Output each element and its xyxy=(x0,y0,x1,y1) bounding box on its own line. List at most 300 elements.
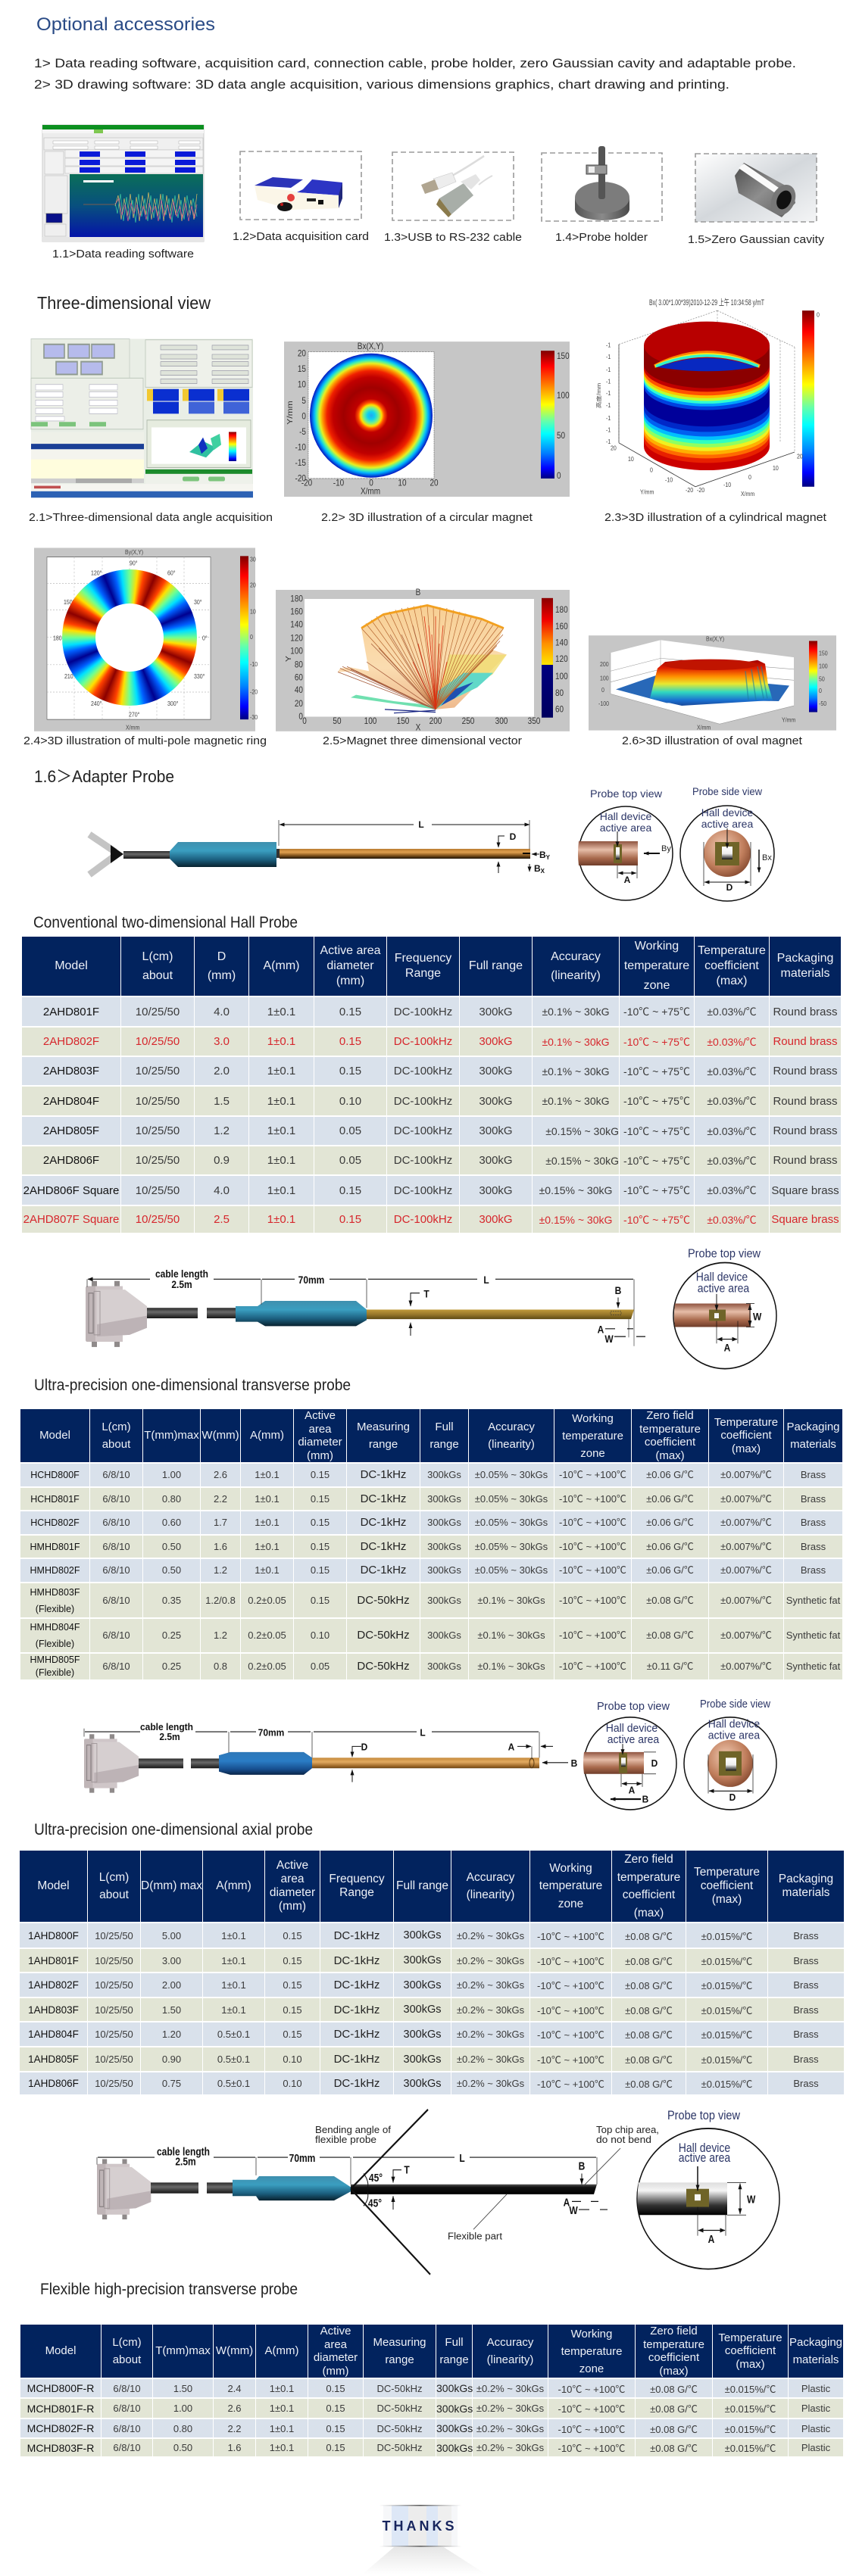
panel: cylindrical magnet plot: Bx( 3.00*1.00*39)2010-12-29 上午 10:34:58 y/mT xyxy=(649,297,764,307)
label: adapter probe views: Probe top view xyxy=(590,787,663,800)
table: ultra-precision one-dimensional axial probe: 1±0.1 xyxy=(221,1929,246,1941)
table: ultra-precision one-dimensional axial probe: 0.15 xyxy=(283,1955,302,1966)
table: conventional two-dimensional hall probe: -10℃ ~ +75℃ xyxy=(623,1184,690,1196)
panel: circular magnet heat map: 150 xyxy=(557,351,570,361)
panel: zero gaussian cavity xyxy=(695,154,817,222)
panel: magnet three dimensional vector plot: 80 xyxy=(555,688,564,698)
table: ultra-precision one-dimensional transverse probe: HMHD803F xyxy=(30,1587,80,1598)
table: ultra-precision one-dimensional transverse probe: 0.80 xyxy=(162,1493,181,1504)
panel: cylindrical magnet plot: 10 xyxy=(773,464,779,472)
detail: adapter probe top view circle: Hall device xyxy=(600,810,651,822)
table: ultra-precision one-dimensional axial probe: ±0.2% ~ 30kGs xyxy=(457,1929,524,1941)
table: conventional two-dimensional hall probe: Working xyxy=(635,940,679,953)
detail: adapter probe side view circle: D xyxy=(726,882,733,893)
detail: axial probe top view circle xyxy=(583,1701,676,1810)
table: ultra-precision one-dimensional axial probe: 300kGs xyxy=(403,2004,441,2016)
table: ultra-precision one-dimensional transverse probe: ±0.05% ~ 30kGs xyxy=(475,1469,548,1480)
panel: cylindrical magnet plot: -1 xyxy=(606,353,611,360)
panel: magnet three dimensional vector plot: 300 xyxy=(495,716,508,726)
color bar: circular magnet xyxy=(541,351,554,479)
table: ultra-precision one-dimensional axial probe: 1AHD804F xyxy=(28,2029,79,2040)
table: ultra-precision one-dimensional axial probe: 10/25/50 xyxy=(95,1955,133,1966)
table: ultra-precision one-dimensional transverse probe: HMHD801F xyxy=(30,1542,80,1552)
heading: three-dimensional view: Three-dimensional view xyxy=(37,293,211,313)
table: flexible high-precision transverse probe: coefficient xyxy=(648,2351,699,2364)
table: conventional two-dimensional hall probe: 4.0 xyxy=(214,1184,230,1196)
table: ultra-precision one-dimensional transverse probe: 6/8/10 xyxy=(102,1469,130,1480)
table: ultra-precision one-dimensional transverse probe: ±0.05% ~ 30kGs xyxy=(475,1564,548,1576)
illustration: adapter probe: B xyxy=(534,863,541,874)
table: conventional two-dimensional hall probe: 0.05 xyxy=(339,1124,361,1137)
table: ultra-precision one-dimensional transverse probe: -10℃ ~ +100℃ xyxy=(559,1661,626,1672)
table: flexible high-precision transverse probe: ±0.015%/℃ xyxy=(725,2403,776,2415)
table: ultra-precision one-dimensional transverse probe: 1.6 xyxy=(214,1540,227,1552)
table: flexible high-precision transverse probe: 6/8/10 xyxy=(113,2403,141,2414)
table: conventional two-dimensional hall probe: 2AHD805F xyxy=(43,1124,99,1137)
panel: magnet three dimensional vector plot: 20 xyxy=(295,699,303,709)
panel: magnet three dimensional vector plot: 60 xyxy=(295,672,303,683)
panel: cylindrical magnet plot: -20 xyxy=(697,486,704,494)
panel: multi-pole magnetic ring plot background: 30 xyxy=(250,556,256,563)
table: ultra-precision one-dimensional transverse probe: 0.8 xyxy=(214,1661,227,1672)
table: flexible high-precision transverse probe: -10℃ ~ +100℃ xyxy=(558,2423,625,2435)
table: ultra-precision one-dimensional transverse probe: (Flexible) xyxy=(36,1604,74,1614)
table: ultra-precision one-dimensional transverse probe: 0.2±0.05 xyxy=(248,1595,286,1605)
table: ultra-precision one-dimensional axial probe: Working xyxy=(549,1862,592,1875)
table: ultra-precision one-dimensional axial probe: zone xyxy=(558,1898,583,1910)
table: conventional two-dimensional hall probe: 2AHD801F xyxy=(43,1006,99,1018)
label: adapter probe views: Probe side view xyxy=(692,785,763,797)
table: ultra-precision one-dimensional axial probe: ±0.015%/℃ xyxy=(701,1931,752,1941)
panel: oval magnet surface plot: 0 xyxy=(601,686,604,694)
table: ultra-precision one-dimensional axial probe: 300kGs xyxy=(403,1929,441,1941)
table: ultra-precision one-dimensional transverse probe: ±0.007%/℃ xyxy=(720,1629,772,1641)
table: conventional two-dimensional hall probe: Range xyxy=(405,967,441,980)
table: conventional two-dimensional hall probe: 0.15 xyxy=(339,1065,361,1077)
table: ultra-precision one-dimensional transverse probe: 1.00 xyxy=(162,1469,181,1480)
table: flexible high-precision transverse probe: 1.6 xyxy=(227,2442,242,2453)
table: conventional two-dimensional hall probe: Packaging xyxy=(777,952,833,965)
panel: multi-pole magnetic ring plot background: 330° xyxy=(194,672,205,680)
panel: cylindrical magnet plot: -1 xyxy=(606,401,611,409)
table: ultra-precision one-dimensional axial probe: 1.20 xyxy=(162,2029,181,2040)
table: conventional two-dimensional hall probe: Round brass xyxy=(773,1124,838,1137)
cylinder body bands xyxy=(644,345,770,470)
table: ultra-precision one-dimensional transverse probe: -10℃ ~ +100℃ xyxy=(559,1629,626,1641)
detail: adapter probe top view circle: A xyxy=(624,875,631,885)
table: conventional two-dimensional hall probe: Round brass xyxy=(773,1035,838,1048)
table: flexible high-precision transverse probe: 2.4 xyxy=(227,2382,242,2394)
table: conventional two-dimensional hall probe: 2AHD803F xyxy=(43,1065,99,1077)
table: ultra-precision one-dimensional transverse probe: -10℃ ~ +100℃ xyxy=(559,1540,626,1552)
table: ultra-precision one-dimensional transverse probe: ±0.1% ~ 30kGs xyxy=(477,1595,545,1605)
table: flexible high-precision transverse probe: Full xyxy=(445,2336,464,2349)
panel: oval magnet surface plot: Y/mm xyxy=(782,716,795,724)
table: flexible high-precision transverse probe: MCHD802F-R xyxy=(27,2422,94,2434)
table: conventional two-dimensional hall probe: 2AHD806F Square xyxy=(23,1184,119,1196)
table: ultra-precision one-dimensional axial probe: ±0.2% ~ 30kGs xyxy=(457,2004,524,2016)
table: ultra-precision one-dimensional transverse probe: 0.15 xyxy=(311,1517,330,1528)
text block: accessory list xyxy=(34,56,796,92)
table: ultra-precision one-dimensional transverse probe: HMHD805F xyxy=(30,1654,80,1665)
panel: circular magnet heat map: -10 xyxy=(295,443,306,453)
panel: magnet three dimensional vector plot: 350 xyxy=(528,716,540,726)
table: ultra-precision one-dimensional transverse probe: DC-50kHz xyxy=(357,1660,410,1673)
panel: multi-pole magnetic ring plot background: 0 xyxy=(250,633,253,641)
table: ultra-precision one-dimensional axial probe: 0.5±0.1 xyxy=(217,2029,250,2040)
table: conventional two-dimensional hall probe: 1±0.1 xyxy=(267,1095,295,1107)
table: ultra-precision one-dimensional axial probe: 300kGs xyxy=(403,2078,441,2090)
table: conventional two-dimensional hall probe: Full range xyxy=(469,959,523,972)
table: ultra-precision one-dimensional transverse probe: 6/8/10 xyxy=(102,1517,130,1528)
heading: ultra-precision transverse probe: Ultra-precision one-dimensional transverse probe xyxy=(34,1377,351,1394)
table: ultra-precision one-dimensional axial probe: Active xyxy=(276,1859,308,1872)
table: conventional two-dimensional hall probe: (mm) xyxy=(336,975,364,987)
table: conventional two-dimensional hall probe: 0.15 xyxy=(339,1006,361,1018)
table: ultra-precision one-dimensional axial probe: 1AHD803F xyxy=(28,2004,79,2016)
detail: flexible probe top view circle: Hall device xyxy=(679,2141,730,2155)
table: flexible high-precision transverse probe: ±0.2% ~ 30kGs xyxy=(476,2423,544,2434)
table: conventional two-dimensional hall probe: (linearity) xyxy=(551,969,601,982)
table: flexible high-precision transverse probe: Accuracy xyxy=(487,2336,533,2349)
table: ultra-precision one-dimensional transverse probe: -10℃ ~ +100℃ xyxy=(559,1564,626,1576)
table: ultra-precision one-dimensional axial probe: ±0.2% ~ 30kGs xyxy=(457,2054,524,2065)
table: flexible high-precision transverse probe: zone xyxy=(579,2362,604,2375)
table: ultra-precision one-dimensional transverse probe: 1±0.1 xyxy=(255,1493,280,1504)
table: ultra-precision one-dimensional axial probe: Brass xyxy=(793,1929,819,1941)
table: flexible high-precision transverse probe: 1±0.1 xyxy=(270,2403,294,2414)
table: flexible high-precision transverse probe: 6/8/10 xyxy=(113,2423,141,2434)
title: optional accessories: Optional accessories xyxy=(36,14,215,35)
detail: adapter probe side view circle xyxy=(680,806,774,901)
table: ultra-precision one-dimensional transverse probe: 0.15 xyxy=(311,1469,330,1480)
table: ultra-precision one-dimensional axial probe: ±0.08 G/℃ xyxy=(625,2054,673,2066)
table: ultra-precision one-dimensional axial probe: ±0.08 G/℃ xyxy=(625,2005,673,2016)
table: ultra-precision one-dimensional axial probe: 10/25/50 xyxy=(95,2078,133,2089)
table: flexible high-precision transverse probe: (max) xyxy=(736,2358,765,2371)
panel: multi-pole magnetic ring plot background: 210° xyxy=(64,672,75,680)
table: ultra-precision one-dimensional transverse probe: ±0.06 G/℃ xyxy=(646,1469,694,1480)
table: ultra-precision one-dimensional axial probe: 10/25/50 xyxy=(95,2004,133,2016)
table: ultra-precision one-dimensional transverse probe: 2.2 xyxy=(214,1493,227,1504)
panel: oval magnet surface plot: Bx(X,Y) xyxy=(706,635,724,643)
panel: circular magnet heat map: 15 xyxy=(298,364,306,374)
table: ultra-precision one-dimensional transverse probe: ±0.007%/℃ xyxy=(720,1540,772,1552)
table: flexible high-precision transverse probe: 1±0.1 xyxy=(270,2423,294,2434)
caption: 2.1: 2.1>Three-dimensional data angle acquisition xyxy=(29,511,273,524)
illustration: flexible probe: cable length xyxy=(157,2146,210,2158)
panel: circular magnet heat map: 0 xyxy=(369,479,373,488)
table: ultra-precision one-dimensional transverse probe: Full xyxy=(435,1421,454,1433)
table: flexible high-precision transverse probe: 2.2 xyxy=(227,2423,242,2434)
panel: circular magnet heat map: 10 xyxy=(298,380,306,390)
table: ultra-precision one-dimensional transverse probe: ±0.08 G/℃ xyxy=(646,1629,694,1641)
table: ultra-precision one-dimensional transverse probe: A(mm) xyxy=(250,1429,284,1442)
table: ultra-precision one-dimensional transverse probe: DC-1kHz xyxy=(361,1516,406,1529)
table: flexible high-precision transverse probe: ±0.015%/℃ xyxy=(725,2384,776,2394)
heading: ultra-precision axial probe: Ultra-precision one-dimensional axial probe xyxy=(34,1821,313,1838)
table: flexible high-precision transverse probe: 0.15 xyxy=(326,2442,345,2453)
table: ultra-precision one-dimensional axial probe: 1AHD805F xyxy=(28,2054,79,2065)
table: ultra-precision one-dimensional transverse probe: 300kGs xyxy=(427,1629,461,1641)
panel: oval magnet surface plot: 50 xyxy=(819,675,825,683)
table: flexible high-precision transverse probe: 2.6 xyxy=(227,2403,242,2414)
table: conventional two-dimensional hall probe: materials xyxy=(781,967,829,980)
illustration: transverse probe: cable length xyxy=(155,1268,208,1280)
table: conventional two-dimensional hall probe: 0.9 xyxy=(214,1154,230,1167)
table: conventional two-dimensional hall probe: ±0.1% ~ 30kG xyxy=(542,1095,609,1107)
panel: cylindrical magnet plot: -20 xyxy=(686,486,693,494)
table: ultra-precision one-dimensional transverse probe: (Flexible) xyxy=(36,1639,74,1649)
table: flexible high-precision transverse probe: Packaging xyxy=(789,2336,842,2349)
table: flexible high-precision transverse probe: diameter xyxy=(314,2351,358,2364)
illustration: transverse probe: 70mm xyxy=(298,1274,324,1286)
table: ultra-precision one-dimensional transverse probe: zone xyxy=(580,1446,605,1460)
table: flexible high-precision transverse probe: DC-50kHz xyxy=(377,2442,422,2453)
heading: 1.6 adapter probe: 1.6＞Adapter Probe xyxy=(34,767,174,786)
table: ultra-precision one-dimensional axial probe: Full range xyxy=(396,1879,448,1892)
illustration: flexible probe: 45° xyxy=(368,2197,382,2210)
table: ultra-precision one-dimensional transverse probe: range xyxy=(430,1438,459,1451)
ring centre hole xyxy=(95,603,164,672)
caption: 1.4: 1.4>Probe holder xyxy=(555,231,648,244)
table: flexible high-precision transverse probe: Working xyxy=(571,2328,612,2340)
table: ultra-precision one-dimensional axial probe: -10℃ ~ +100℃ xyxy=(537,1931,604,1941)
table: conventional two-dimensional hall probe: coefficient xyxy=(704,959,759,972)
table: ultra-precision one-dimensional axial probe: (mm) xyxy=(279,1900,306,1913)
table: ultra-precision one-dimensional axial probe: coefficient xyxy=(623,1888,675,1901)
table: ultra-precision one-dimensional transverse probe: 0.25 xyxy=(162,1629,181,1641)
table: conventional two-dimensional hall probe: DC-100kHz xyxy=(394,1095,452,1107)
table: ultra-precision one-dimensional transverse probe: 1.2 xyxy=(214,1629,227,1641)
detail: flexible probe top view circle: active area xyxy=(679,2151,731,2165)
caption: 1.1: 1.1>Data reading software xyxy=(52,248,194,260)
table: ultra-precision one-dimensional transverse probe: (linearity) xyxy=(488,1438,535,1451)
table: conventional two-dimensional hall probe: Square brass xyxy=(771,1213,839,1226)
table: flexible high-precision transverse probe: Measuring xyxy=(373,2336,426,2349)
table: conventional two-dimensional hall probe: 2AHD804F xyxy=(43,1095,99,1107)
thanks banner xyxy=(362,2505,486,2574)
table: ultra-precision one-dimensional transverse probe: Measuring xyxy=(357,1421,410,1433)
table: ultra-precision one-dimensional transverse probe: DC-50kHz xyxy=(357,1593,410,1607)
panel: cylindrical magnet plot: 10 xyxy=(628,455,634,463)
table: ultra-precision one-dimensional transverse probe: (Flexible) xyxy=(36,1667,74,1678)
panel: oval magnet surface plot: 0 xyxy=(819,688,822,694)
table: ultra-precision one-dimensional axial probe: D(mm) max xyxy=(141,1879,202,1892)
detail: transverse probe top view circle: Hall device xyxy=(696,1271,748,1284)
table: ultra-precision one-dimensional transverse probe: HCHD800F xyxy=(30,1470,80,1480)
table: ultra-precision one-dimensional axial probe xyxy=(20,1851,844,2094)
table: ultra-precision one-dimensional axial probe: about xyxy=(99,1888,129,1901)
table: ultra-precision one-dimensional transverse probe: 1.7 xyxy=(214,1517,227,1528)
table: flexible high-precision transverse probe: MCHD803F-R xyxy=(27,2441,94,2453)
table: ultra-precision one-dimensional transverse probe: Brass xyxy=(801,1517,826,1528)
table: ultra-precision one-dimensional axial probe: ±0.2% ~ 30kGs xyxy=(457,2078,524,2089)
panel: multi-pole magnetic ring plot background: 90° xyxy=(130,560,138,567)
detail: flexible probe top view circle: Probe top view xyxy=(667,2109,741,2122)
panel: oval magnet surface plot: 150 xyxy=(819,650,828,657)
panel: cylindrical magnet plot: 20 xyxy=(797,453,803,460)
detail: axial probe top view circle: Hall device xyxy=(606,1723,658,1735)
table: ultra-precision one-dimensional axial probe: ±0.2% ~ 30kGs xyxy=(457,2029,524,2040)
panel: magnet three dimensional vector plot: 40 xyxy=(295,685,303,695)
panel: cylindrical magnet plot: 0 xyxy=(650,466,653,474)
illustration: axial probe: 70mm xyxy=(258,1727,284,1739)
table: ultra-precision one-dimensional transverse probe: ±0.05% ~ 30kGs xyxy=(475,1493,548,1504)
table: ultra-precision one-dimensional axial probe: temperature xyxy=(539,1879,602,1892)
table: ultra-precision one-dimensional transverse probe: 6/8/10 xyxy=(102,1540,130,1552)
table: ultra-precision one-dimensional axial probe: 0.90 xyxy=(162,2054,181,2065)
table: ultra-precision one-dimensional transverse probe: ±0.007%/℃ xyxy=(720,1517,772,1528)
table: ultra-precision one-dimensional transverse probe: -10℃ ~ +100℃ xyxy=(559,1595,626,1605)
panel: magnet three dimensional vector plot: 250 xyxy=(462,716,474,726)
table: flexible high-precision transverse probe: 0.50 xyxy=(173,2442,192,2453)
table: conventional two-dimensional hall probe: 2.0 xyxy=(214,1065,230,1077)
table: ultra-precision one-dimensional axial probe: DC-1kHz xyxy=(334,2028,380,2041)
table: ultra-precision one-dimensional transverse probe: 0.50 xyxy=(162,1564,181,1576)
table: conventional two-dimensional hall probe: -10℃ ~ +75℃ xyxy=(623,1213,690,1225)
table: conventional two-dimensional hall probe: ±0.15% ~ 30kG xyxy=(539,1213,612,1225)
table: ultra-precision one-dimensional transverse probe: range xyxy=(369,1438,398,1451)
table: conventional two-dimensional hall probe: -10℃ ~ +75℃ xyxy=(623,1154,690,1166)
panel: cylindrical magnet plot xyxy=(595,297,820,497)
panel: oval magnet surface plot: 200 xyxy=(600,661,609,668)
table: ultra-precision one-dimensional transverse probe: 0.2±0.05 xyxy=(248,1661,286,1672)
table: ultra-precision one-dimensional transverse probe: Synthetic fat xyxy=(786,1661,840,1672)
table: conventional two-dimensional hall probe: 2AHD806F xyxy=(43,1154,99,1167)
table: ultra-precision one-dimensional axial probe: (linearity) xyxy=(467,1888,514,1901)
heading: conventional two-dimensional hall probe: Conventional two-dimensional Hall Probe xyxy=(33,914,298,931)
table: conventional two-dimensional hall probe: ±0.15% ~ 30kG xyxy=(545,1154,619,1166)
table: ultra-precision one-dimensional axial probe: 1±0.1 xyxy=(221,2004,246,2016)
table: ultra-precision one-dimensional transverse probe: (mm) xyxy=(307,1449,333,1461)
panel: oval magnet surface plot: X/mm xyxy=(697,724,711,731)
table: ultra-precision one-dimensional transverse probe: DC-1kHz xyxy=(361,1492,406,1505)
illustration: transverse probe: A xyxy=(598,1324,604,1336)
table: conventional two-dimensional hall probe: Round brass xyxy=(773,1065,838,1077)
table: ultra-precision one-dimensional axial probe: (max) xyxy=(712,1893,742,1906)
panel: cylindrical magnet plot: Y/mm xyxy=(640,488,654,496)
table: ultra-precision one-dimensional axial probe: Brass xyxy=(793,2078,819,2089)
panel: magnet three dimensional vector plot: 60 xyxy=(555,705,564,715)
table: ultra-precision one-dimensional axial probe: 300kGs xyxy=(403,2028,441,2040)
table: conventional two-dimensional hall probe: 2AHD807F Square xyxy=(23,1213,119,1226)
table: conventional two-dimensional hall probe: ±0.1% ~ 30kG xyxy=(542,1006,609,1018)
table: conventional two-dimensional hall probe: -10℃ ~ +75℃ xyxy=(623,1095,690,1107)
table: conventional two-dimensional hall probe: 0.15 xyxy=(339,1035,361,1048)
label: adapter probe views xyxy=(590,785,763,800)
table: ultra-precision one-dimensional axial probe: L(cm) xyxy=(99,1871,129,1884)
table: flexible high-precision transverse probe: T(mm)max xyxy=(155,2344,211,2357)
table: ultra-precision one-dimensional transverse probe: temperature xyxy=(562,1430,623,1442)
table: conventional two-dimensional hall probe: L(cm) xyxy=(142,950,173,963)
table: ultra-precision one-dimensional transverse probe: ±0.08 G/℃ xyxy=(646,1595,694,1605)
table: ultra-precision one-dimensional transverse probe: 300kGs xyxy=(427,1661,461,1672)
table: ultra-precision one-dimensional transverse probe: Accuracy xyxy=(488,1421,535,1433)
table: ultra-precision one-dimensional transverse probe: Temperature xyxy=(714,1416,778,1429)
table: flexible high-precision transverse probe: materials xyxy=(793,2353,839,2366)
table: conventional two-dimensional hall probe: diameter xyxy=(326,959,374,972)
panel: circular magnet heat map: 10 xyxy=(398,479,407,488)
table: conventional two-dimensional hall probe: ±0.03%/℃ xyxy=(707,1006,757,1018)
table: ultra-precision one-dimensional transverse probe: materials xyxy=(790,1438,836,1451)
table: ultra-precision one-dimensional axial probe: DC-1kHz xyxy=(334,2004,380,2016)
table: conventional two-dimensional hall probe: 10/25/50 xyxy=(136,1065,180,1077)
table: conventional two-dimensional hall probe: ±0.1% ~ 30kG xyxy=(542,1036,609,1048)
table: flexible high-precision transverse probe: range xyxy=(439,2353,469,2366)
table: ultra-precision one-dimensional axial probe: Model xyxy=(37,1879,70,1892)
table: conventional two-dimensional hall probe: ±0.03%/℃ xyxy=(707,1065,757,1077)
detail: axial probe top view circle: A xyxy=(629,1785,635,1796)
panel: multi-pole magnetic ring plot background: X/mm xyxy=(126,724,139,731)
table: ultra-precision one-dimensional transverse probe: (max) xyxy=(732,1442,761,1455)
panel: multi-pole magnetic ring plot background: -10 xyxy=(250,661,258,668)
table: ultra-precision one-dimensional axial probe: -10℃ ~ +100℃ xyxy=(537,2054,604,2066)
table: ultra-precision one-dimensional transverse probe: DC-50kHz xyxy=(357,1629,410,1642)
illustration: axial probe: cable length xyxy=(140,1722,193,1732)
detail: transverse probe top view circle: A xyxy=(724,1342,730,1354)
table: ultra-precision one-dimensional transverse probe: (max) xyxy=(655,1449,685,1461)
table: flexible high-precision transverse probe: 300kGs xyxy=(436,2382,473,2394)
table: conventional two-dimensional hall probe: 2.5 xyxy=(214,1213,230,1226)
panel: magnet three dimensional vector plot: Y xyxy=(285,655,293,662)
panel: circular magnet heat map: Y/mm xyxy=(286,401,295,425)
chart: multi-pole magnetic ring xyxy=(62,569,197,706)
caption: 1.3: 1.3>USB to RS-232 cable xyxy=(384,231,522,244)
detail: adapter probe top view circle: By xyxy=(661,844,671,853)
table: ultra-precision one-dimensional transverse probe: 0.15 xyxy=(311,1493,330,1504)
table: flexible high-precision transverse probe: coefficient xyxy=(725,2344,776,2357)
table: ultra-precision one-dimensional axial probe: 5.00 xyxy=(162,1929,181,1941)
panel: circular magnet heat map: -20 xyxy=(295,474,306,484)
table: ultra-precision one-dimensional transverse probe: 0.15 xyxy=(311,1564,330,1576)
illustration: flexible probe: 70mm xyxy=(289,2152,315,2164)
table: conventional two-dimensional hall probe: Round brass xyxy=(773,1006,838,1018)
panel: cylindrical magnet plot: 20 xyxy=(611,444,617,452)
illustration: flexible probe: W xyxy=(569,2204,578,2216)
panel: magnet three dimensional vector plot: 0 xyxy=(302,716,307,726)
table: conventional two-dimensional hall probe: zone xyxy=(644,979,670,992)
panel: probe holder xyxy=(542,146,662,221)
table: conventional two-dimensional hall probe: 1±0.1 xyxy=(267,1035,295,1048)
illustration: flexible probe: A xyxy=(564,2196,570,2209)
panel: data reading software screenshot xyxy=(42,125,204,242)
panel: magnet three dimensional vector plot: 80 xyxy=(295,660,303,670)
illustration: transverse probe: B xyxy=(615,1284,621,1296)
panel: magnet three dimensional vector plot: 100 xyxy=(290,647,303,656)
table: conventional two-dimensional hall probe: ±0.15% ~ 30kG xyxy=(539,1184,612,1196)
table: flexible high-precision transverse probe: Zero field xyxy=(650,2325,698,2337)
illustration: flexible probe xyxy=(97,2110,659,2275)
table: flexible high-precision transverse probe: Temperature xyxy=(718,2331,782,2344)
table: ultra-precision one-dimensional transverse probe: HMHD804F xyxy=(30,1622,80,1633)
table: flexible high-precision transverse probe: 1.50 xyxy=(173,2382,192,2394)
table: ultra-precision one-dimensional transverse probe: 6/8/10 xyxy=(102,1629,130,1641)
table: flexible high-precision transverse probe: 1±0.1 xyxy=(270,2442,294,2453)
table: conventional two-dimensional hall probe: Frequency xyxy=(395,952,451,965)
table: conventional two-dimensional hall probe: ±0.03%/℃ xyxy=(707,1154,757,1166)
table: conventional two-dimensional hall probe: 1±0.1 xyxy=(267,1006,295,1018)
detail: axial probe side view circle: D xyxy=(729,1792,736,1803)
detail: axial probe side view circle: Probe side view xyxy=(700,1698,770,1711)
table: ultra-precision one-dimensional axial probe: DC-1kHz xyxy=(334,1979,380,1991)
table: conventional two-dimensional hall probe: 10/25/50 xyxy=(136,1035,180,1048)
table: conventional two-dimensional hall probe: DC-100kHz xyxy=(394,1124,452,1137)
table: ultra-precision one-dimensional axial probe: 3.00 xyxy=(162,1955,181,1966)
table: conventional two-dimensional hall probe: (max) xyxy=(717,975,747,987)
table: ultra-precision one-dimensional transverse probe: ±0.007%/℃ xyxy=(720,1564,772,1576)
illustration: axial probe: A xyxy=(508,1742,514,1753)
